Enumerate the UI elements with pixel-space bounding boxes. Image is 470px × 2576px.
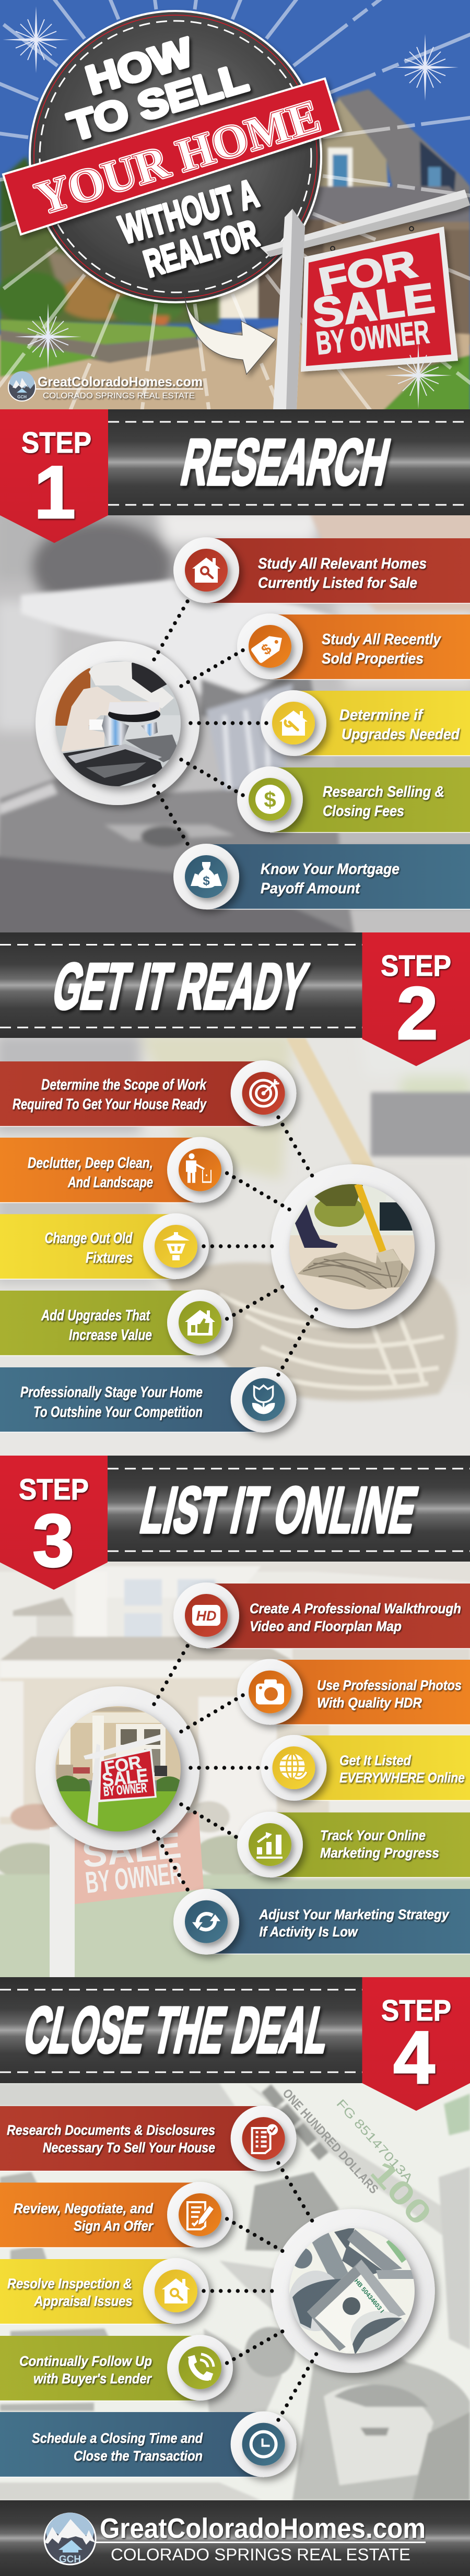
title: without a realtor: WITHOUT A	[114, 171, 263, 252]
title: without a realtor	[114, 171, 263, 285]
icon: camera	[256, 1680, 284, 1705]
header logo: GCH	[17, 395, 27, 399]
row: schedule closing: Close the Transaction	[74, 2448, 203, 2464]
icon: house with thumb up	[185, 1310, 215, 1336]
title: without a realtor: REALTOR	[139, 212, 263, 285]
step 4 dotted connectors	[204, 2163, 316, 2420]
header background photo: house and sky	[0, 0, 470, 418]
row: adjust strategy: Adjust Your Marketing Strategy	[259, 1907, 450, 1922]
row: mortgage payoff	[173, 844, 470, 909]
serial number on bill: FG 85147013A	[334, 2097, 416, 2185]
row: determine upgrades: Upgrades Needed	[342, 726, 460, 743]
icon: globe	[280, 1754, 306, 1779]
row: change fixtures: Change Out Old	[45, 1230, 133, 1247]
title: how to sell	[64, 30, 253, 149]
footer site name: GreatColoradoHomes.com	[100, 2513, 426, 2544]
step 1 ribbon	[0, 409, 108, 543]
row: schedule closing	[0, 2412, 297, 2477]
step 3 ribbon	[0, 1456, 108, 1590]
icon: sync arrows	[192, 1914, 220, 1930]
row: scope of work: Required To Get Your House Ready	[13, 1096, 207, 1113]
row: scope of work: Determine the Scope of Work	[41, 1077, 207, 1093]
step 4 ribbon: 4	[393, 2016, 435, 2099]
row: add upgrades: Increase Value	[69, 1327, 152, 1344]
step 2 hero circle: mop	[271, 1164, 435, 1328]
icon: house inspection	[162, 2278, 190, 2303]
section 4 background photo: money	[0, 2083, 470, 2500]
row: stage your home	[0, 1367, 297, 1433]
icon: price tag: $	[258, 640, 275, 658]
row: scope of work	[0, 1060, 297, 1127]
row: study listed homes: Study All Relevant Homes	[258, 556, 427, 572]
red ribbon: your home: YOUR HOME	[30, 91, 326, 224]
sunburst rays	[0, 0, 470, 409]
row: study sold properties	[237, 613, 470, 680]
row: review offer	[0, 2182, 233, 2248]
step 1 list rows	[173, 537, 470, 909]
row: list everywhere: Get It Listed	[339, 1753, 411, 1768]
row: add upgrades: Add Upgrades That	[41, 1307, 150, 1324]
step 2 ribbon: STEP	[381, 949, 451, 983]
row: adjust strategy: If Activity Is Low	[259, 1924, 358, 1940]
footer logo badge	[44, 2513, 96, 2565]
step 2 ribbon	[362, 932, 470, 1066]
step 4 header bar	[0, 1977, 470, 2111]
icon: document and pen	[187, 2202, 214, 2229]
title: how to sell: TO SELL	[64, 55, 253, 149]
step 4 ribbon: STEP	[381, 1994, 451, 2027]
row: declutter	[0, 1137, 233, 1203]
icon: bar chart	[256, 1832, 283, 1859]
step 3 ribbon: STEP	[19, 1473, 89, 1506]
step 1 hero circle: microscope	[36, 641, 199, 805]
row: resolve inspection: Resolve Inspection &	[7, 2276, 132, 2291]
arrow from badge to sign	[184, 294, 276, 374]
red ribbon: your home: YOUR HOME	[30, 91, 326, 224]
icon: house with magnifier	[192, 558, 220, 583]
row: schedule closing: Schedule a Closing Time and	[32, 2430, 203, 2446]
step 3 hero circle: for sale sign: SALE	[101, 1764, 149, 1791]
row: study sold properties: Study All Recently	[322, 631, 442, 648]
row: track progress	[237, 1812, 470, 1877]
faded sign in background: BY OWNER	[84, 1856, 184, 1900]
row: research documents: Necessary To Sell Your House	[43, 2140, 215, 2156]
row: adjust strategy	[173, 1889, 470, 1955]
icon: money bags: $	[203, 874, 210, 888]
icon: tulip	[253, 1386, 274, 1413]
step 3 ribbon: 3	[32, 1499, 74, 1582]
row: professional photos	[237, 1659, 470, 1725]
row: review offer: Sign An Offer	[74, 2218, 154, 2234]
icon: person with bin	[186, 1153, 212, 1183]
step 3 hero circle: for sale sign: FOR	[103, 1752, 143, 1778]
step 4 ribbon	[362, 1977, 470, 2111]
icon: telephone	[189, 2354, 214, 2380]
footer tagline: COLORADO SPRINGS REAL ESTATE	[111, 2545, 410, 2564]
bill text: one hundred: ONE HUNDRED DOLLARS	[280, 2086, 381, 2196]
row: declutter: And Landscape	[67, 1174, 153, 1191]
row: stage your home: To Outshine Your Competition	[33, 1404, 203, 1421]
step 3 hero circle: for sale sign	[36, 1686, 199, 1850]
row: resolve inspection	[0, 2258, 209, 2324]
footer bar	[0, 2500, 470, 2576]
row: research documents	[0, 2106, 297, 2171]
row: review offer: Review, Negotiate, and	[14, 2201, 153, 2216]
row: walkthrough video	[173, 1582, 470, 1649]
section 1 background photo: microscope	[0, 509, 470, 940]
row: resolve inspection: Appraisal Issues	[34, 2294, 133, 2309]
step 3 dotted connectors	[154, 1639, 266, 1897]
step 4 hero circle: money	[271, 2209, 435, 2373]
row: walkthrough video: Video and Floorplan Map	[250, 1618, 402, 1634]
row: professional photos: With Quality HDR	[317, 1695, 422, 1711]
row: study listed homes: Currently Listed for Sale	[258, 575, 417, 592]
header logo	[8, 371, 203, 401]
step 2 header bar	[0, 932, 470, 1066]
step 3 list rows	[173, 1582, 470, 1955]
row: change fixtures	[0, 1213, 209, 1279]
step 1 dotted connectors	[154, 594, 266, 851]
step 1 ribbon: 1	[34, 451, 76, 534]
header panel	[0, 0, 470, 409]
row: change fixtures: Fixtures	[86, 1250, 133, 1267]
step 1 ribbon: STEP	[21, 426, 91, 459]
section 3 background photo: house	[0, 1562, 470, 1984]
section 2 background photo: mop	[0, 1034, 470, 1462]
row: follow up lender: with Buyer's Lender	[33, 2371, 152, 2386]
step 2 ribbon: 2	[396, 972, 438, 1055]
row: mortgage payoff: Know Your Mortgage	[261, 861, 400, 878]
faded sign in background	[50, 1812, 204, 1979]
sparkle stars	[3, 6, 459, 370]
icon: lamp fixture	[162, 1232, 190, 1260]
step 2 list rows	[0, 1060, 297, 1433]
row: selling fees: Closing Fees	[323, 803, 404, 820]
step 3 header bar	[0, 1456, 470, 1590]
row: track progress: Marketing Progress	[320, 1845, 439, 1861]
row: add upgrades	[0, 1290, 233, 1355]
sparkle over sign	[385, 342, 452, 409]
step 3 hero circle: for sale sign: BY OWNER	[103, 1780, 147, 1799]
title badge circle	[30, 11, 321, 302]
step 2 dotted connectors	[204, 1117, 316, 1375]
row: track progress: Track Your Online	[320, 1827, 426, 1843]
step 1 header bar	[0, 409, 470, 543]
icon: checklist document	[252, 2124, 278, 2153]
for sale sign: SALE	[310, 275, 437, 337]
row: declutter: Declutter, Deep Clean,	[28, 1155, 153, 1172]
faded sign in background: SALE	[80, 1824, 183, 1875]
icon: clock	[251, 2432, 276, 2457]
footer logo badge: GCH	[59, 2554, 81, 2565]
row: study listed homes	[173, 537, 470, 604]
icon: house with wrench	[279, 711, 308, 736]
icon: target	[251, 1079, 279, 1106]
row: study sold properties: Sold Properties	[322, 651, 424, 667]
row: mortgage payoff: Payoff Amount	[261, 880, 360, 897]
title: how to sell: HOW	[81, 30, 198, 103]
header logo: GreatColoradoHomes.com	[38, 374, 203, 389]
icon: dollar coin: $	[264, 787, 276, 812]
row: selling fees	[237, 766, 470, 832]
row: follow up lender: Continually Follow Up	[19, 2354, 152, 2369]
row: list everywhere	[261, 1735, 470, 1801]
row: research documents: Research Documents & Disclosures	[7, 2122, 215, 2138]
icon: HD badge: HD	[196, 1608, 216, 1624]
row: follow up lender	[0, 2335, 233, 2401]
green 100 on bill: 100	[363, 2154, 439, 2232]
row: determine upgrades	[261, 690, 470, 756]
for sale sign	[260, 190, 470, 409]
step 4 list rows	[0, 2106, 297, 2477]
row: stage your home: Professionally Stage Your Home	[20, 1384, 203, 1401]
row: determine upgrades: Determine if	[339, 707, 424, 724]
bill serial number: HB 50434603 I	[353, 2277, 385, 2314]
header logo: COLORADO SPRINGS REAL ESTATE	[43, 392, 195, 400]
row: selling fees: Research Selling &	[323, 784, 444, 800]
for sale sign: FOR	[315, 242, 420, 304]
